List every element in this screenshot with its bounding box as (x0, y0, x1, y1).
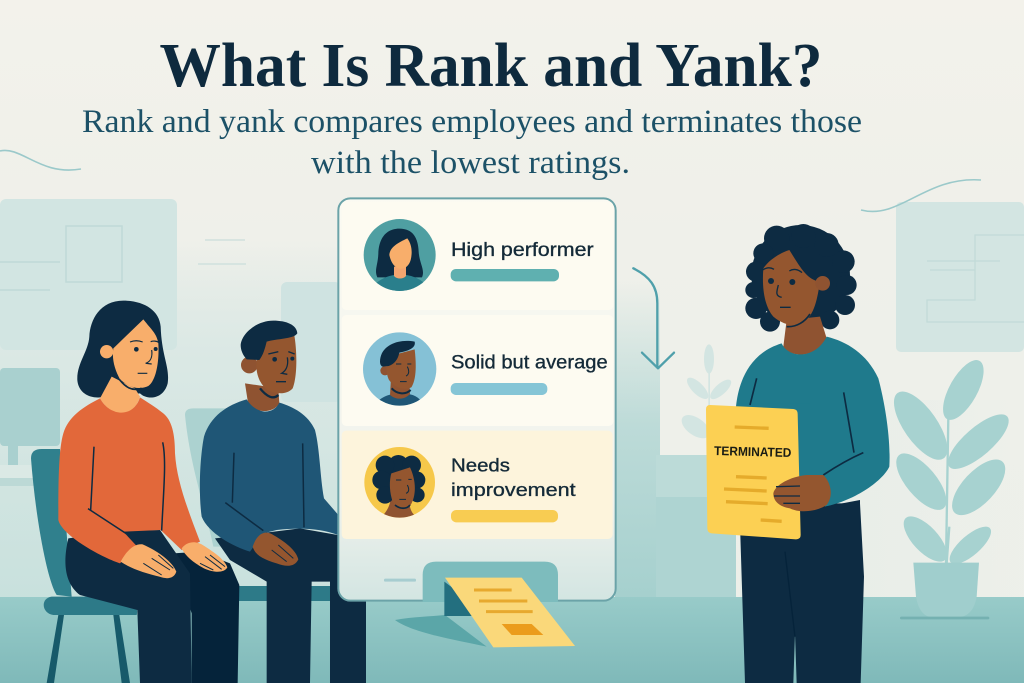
avatar: needs improvement (363, 447, 437, 520)
chair: left (31, 449, 137, 683)
row: solid but average (342, 332, 613, 426)
row: needs improvement (342, 431, 613, 539)
label: needs improvement: Needs (451, 455, 510, 476)
hair (745, 224, 857, 332)
title: What Is Rank and Yank? (160, 32, 822, 100)
bar: solid but average (451, 383, 547, 395)
printed slip (445, 578, 575, 647)
subtitle: with the lowest ratings. (311, 145, 630, 181)
woman standing with termination notice (706, 224, 890, 683)
chair: right (185, 408, 337, 601)
card dash (384, 579, 416, 582)
subtitle: Rank and yank compares employees and terminates those (82, 104, 862, 140)
row: high performer (364, 202, 613, 291)
output slot (395, 562, 558, 647)
label: needs improvement: improvement (451, 479, 577, 500)
woman seated (58, 301, 239, 683)
subtitle (82, 104, 862, 181)
avatar: high performer (363, 218, 437, 292)
man seated (200, 321, 366, 683)
notice: TERMINATED (714, 444, 792, 460)
avatar: solid but average (362, 332, 438, 408)
arrow down (633, 268, 674, 368)
decorative wave left (0, 150, 81, 170)
label: high performer: High performer (451, 240, 594, 261)
bar: high performer (451, 269, 559, 281)
hand (773, 475, 831, 511)
background plant small (678, 344, 734, 453)
decorative wave right (861, 180, 981, 211)
bar: needs improvement (451, 510, 558, 522)
ranking card (338, 198, 616, 647)
notice (706, 405, 801, 539)
label: needs improvement (451, 455, 577, 500)
label: solid but average: Solid but average (451, 352, 608, 373)
potted plant (884, 354, 1016, 619)
